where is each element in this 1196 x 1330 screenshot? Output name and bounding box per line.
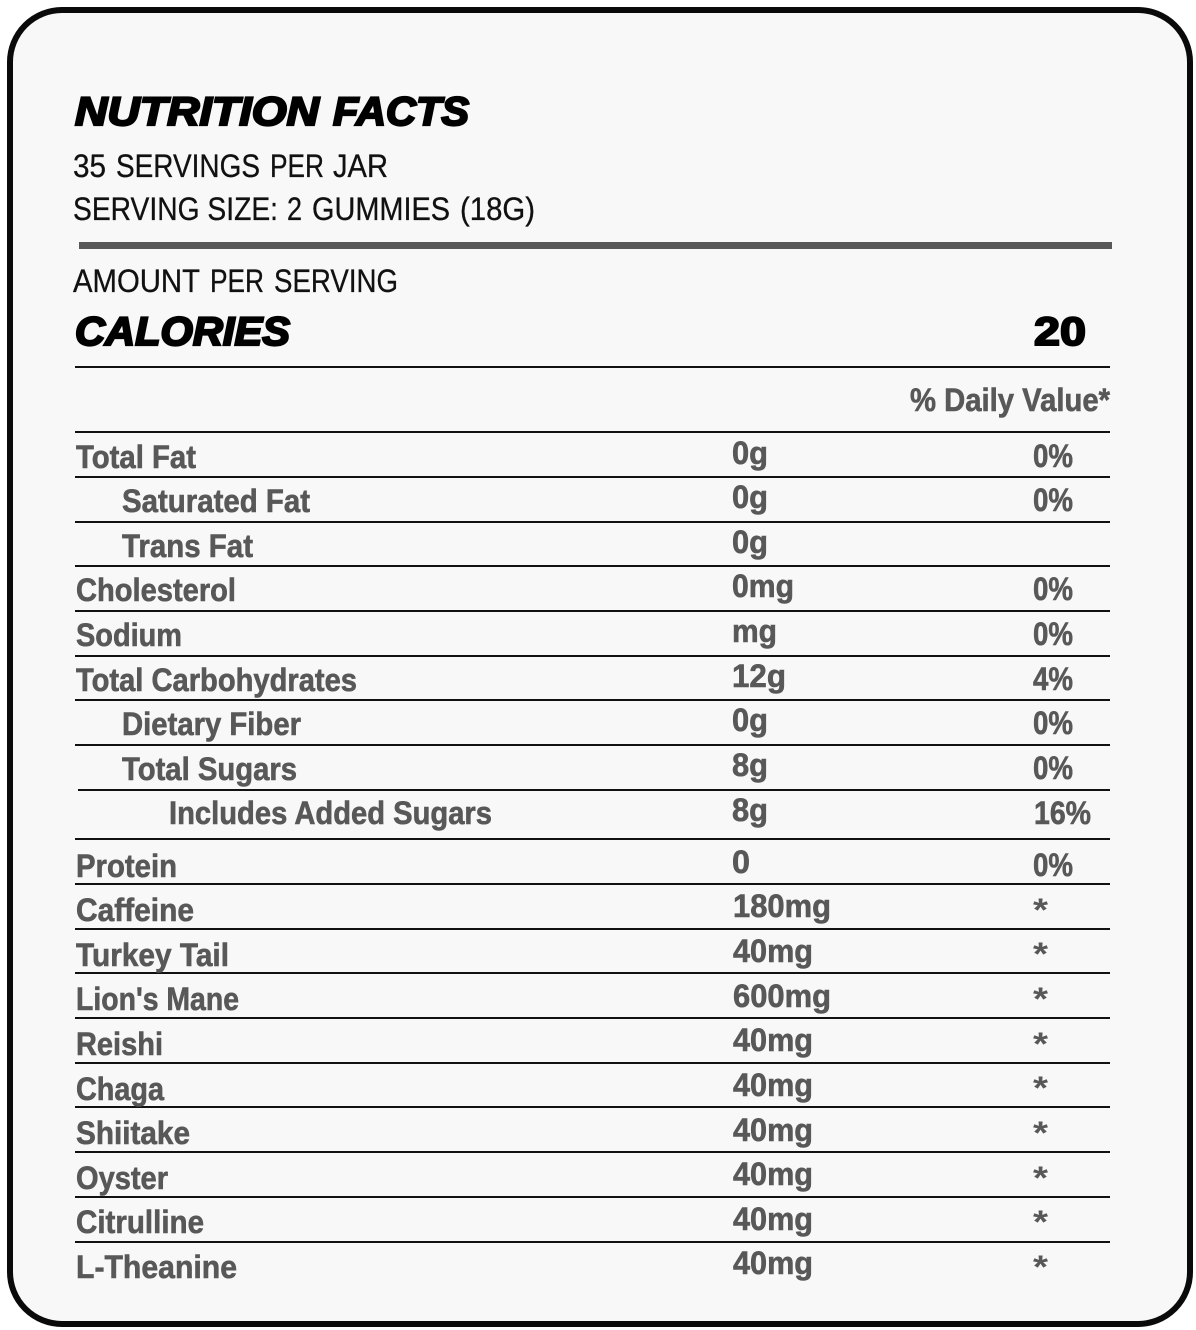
row: Turkey Tail: Turkey Tail	[76, 937, 229, 973]
row: Saturated Fat: Saturated Fat	[122, 483, 310, 519]
row: Total Sugars: 0%	[1033, 750, 1073, 786]
row: Sodium: 0%	[1033, 616, 1073, 652]
row: Lion's Mane: *	[1033, 981, 1049, 1017]
row: Oyster: 40mg	[733, 1156, 813, 1192]
row: Total Carbohydrates	[76, 658, 1073, 698]
row: Caffeine: *	[1033, 892, 1049, 928]
title: FACTS	[333, 90, 469, 134]
row: Includes Added Sugars: 16%	[1034, 795, 1091, 831]
row: Dietary Fiber: Dietary Fiber	[122, 706, 301, 742]
row: Lion's Mane: 600mg	[733, 978, 831, 1014]
row: Saturated Fat	[122, 479, 1073, 519]
row: Total Sugars	[122, 747, 1073, 787]
row: Total Carbohydrates: 12g	[732, 658, 786, 694]
row: Total Carbohydrates: 4%	[1033, 661, 1073, 697]
row: Protein: 0	[732, 844, 750, 880]
row: Trans Fat	[122, 524, 768, 564]
row: L-Theanine	[76, 1245, 1049, 1285]
row: Reishi: Reishi	[76, 1026, 163, 1062]
row: L-Theanine: L-Theanine	[76, 1249, 237, 1285]
row: Caffeine: Caffeine	[76, 892, 194, 928]
row: Dietary Fiber: 0%	[1033, 705, 1073, 741]
row: Total Sugars: Total Sugars	[122, 751, 297, 787]
row: L-Theanine: 40mg	[733, 1245, 813, 1281]
row: Citrulline	[76, 1201, 1049, 1240]
row: Sodium: mg	[732, 613, 777, 649]
row: Cholesterol: 0%	[1033, 571, 1073, 607]
row: Sodium	[76, 613, 1073, 653]
row: Protein: Protein	[76, 848, 177, 884]
title	[75, 90, 469, 134]
amount per serving: SERVING	[274, 263, 398, 299]
daily value header: % Daily Value*	[910, 382, 1110, 418]
row: Citrulline: *	[1033, 1204, 1049, 1240]
row: Oyster	[76, 1156, 1049, 1196]
row: Shiitake: 40mg	[733, 1112, 813, 1148]
row: Citrulline: 40mg	[733, 1201, 813, 1237]
row: Reishi: *	[1033, 1026, 1049, 1062]
row: Dietary Fiber	[122, 702, 1073, 742]
row: Sodium: Sodium	[76, 617, 182, 653]
calories label: CALORIES	[75, 310, 290, 354]
row: Dietary Fiber: 0g	[732, 702, 768, 738]
row: Total Sugars: 8g	[732, 747, 768, 783]
row: Turkey Tail	[76, 933, 1049, 973]
row: Turkey Tail: 40mg	[733, 933, 813, 969]
servings per jar	[73, 148, 388, 184]
amount per serving: AMOUNT	[73, 263, 200, 299]
row: Protein	[76, 844, 1073, 884]
row: Trans Fat: 0g	[732, 524, 768, 560]
row: Saturated Fat: 0%	[1033, 482, 1073, 518]
row: Cholesterol: Cholesterol	[76, 572, 236, 608]
row: Turkey Tail: *	[1033, 936, 1049, 972]
servings per jar: 35	[73, 148, 106, 184]
row: Lion's Mane: Lion's Mane	[76, 981, 239, 1017]
title: NUTRITION	[75, 90, 320, 134]
servings per jar: JAR	[333, 148, 388, 184]
servings per jar: SERVINGS	[116, 148, 260, 184]
servings per jar: PER	[270, 148, 324, 184]
row: Cholesterol: 0mg	[732, 568, 794, 604]
row: Shiitake	[76, 1112, 1049, 1151]
row: Protein: 0%	[1033, 847, 1073, 883]
row: Includes Added Sugars: 8g	[732, 792, 768, 828]
row: Includes Added Sugars: Includes Added Sugars	[169, 795, 492, 831]
serving size: SERVING SIZE:	[73, 191, 278, 227]
row: Total Fat	[76, 435, 1073, 475]
amount per serving: PER	[210, 263, 264, 299]
row: Total Fat: 0g	[732, 435, 768, 471]
row: Shiitake: *	[1033, 1115, 1049, 1151]
serving size: (18G)	[460, 191, 535, 227]
row: Oyster: *	[1033, 1160, 1049, 1196]
row: Chaga: Chaga	[76, 1071, 164, 1107]
row: Caffeine: 180mg	[733, 888, 831, 924]
row: Cholesterol	[76, 568, 1073, 608]
row: Total Fat: Total Fat	[76, 439, 196, 475]
serving size: 2	[287, 191, 302, 227]
row: Oyster: Oyster	[76, 1160, 168, 1196]
row: Shiitake: Shiitake	[76, 1115, 190, 1151]
row: Total Carbohydrates: Total Carbohydrates	[76, 662, 357, 698]
serving size	[73, 191, 535, 227]
row: Total Fat: 0%	[1033, 438, 1073, 474]
calories value: 20	[1034, 310, 1086, 354]
row: Chaga: *	[1033, 1070, 1049, 1106]
row: L-Theanine: *	[1033, 1249, 1049, 1285]
row: Caffeine	[76, 888, 1049, 928]
row: Reishi: 40mg	[733, 1022, 813, 1058]
row: Includes Added Sugars	[169, 792, 1091, 831]
row: Citrulline: Citrulline	[76, 1204, 204, 1240]
row: Trans Fat: Trans Fat	[122, 528, 253, 564]
row: Saturated Fat: 0g	[732, 479, 768, 515]
serving size: GUMMIES	[312, 191, 450, 227]
row: Reishi	[76, 1022, 1049, 1062]
row: Chaga: 40mg	[733, 1067, 813, 1103]
row: Lion's Mane	[76, 978, 1049, 1017]
amount per serving	[73, 263, 398, 299]
row: Chaga	[76, 1067, 1049, 1107]
